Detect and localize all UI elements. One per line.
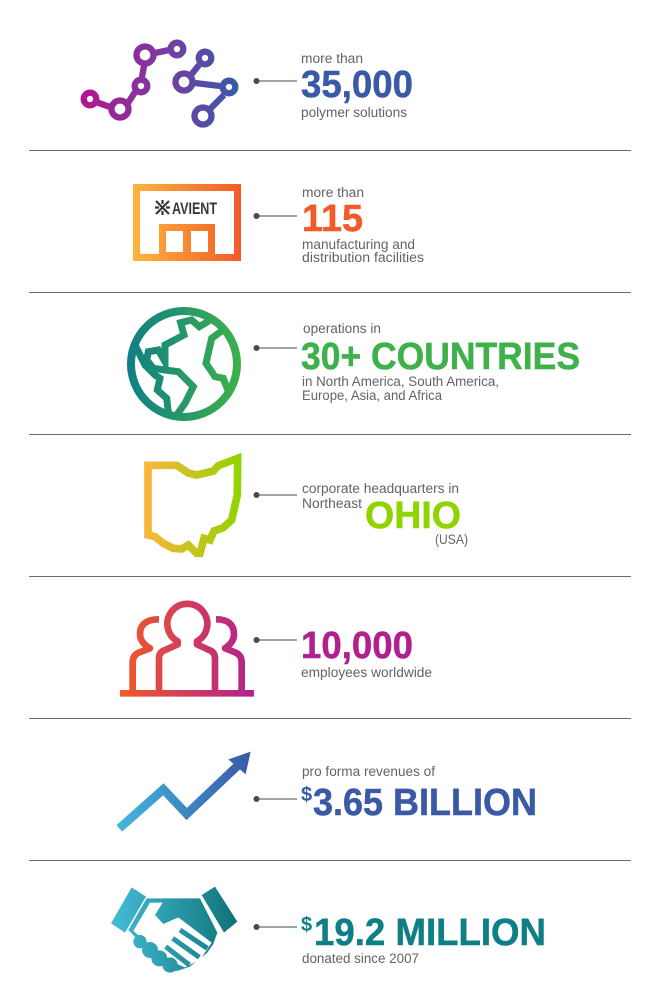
- text block: 19.2 MILLION: [314, 912, 546, 954]
- text block: [301, 321, 580, 403]
- text block: 10,000: [301, 625, 413, 667]
- leader line: [254, 796, 297, 802]
- text block: distribution facilities: [302, 250, 424, 265]
- panel: donations: [111, 887, 546, 973]
- text block: employees worldwide: [301, 665, 432, 680]
- text block: (USA): [435, 532, 468, 547]
- icon: molecules: [84, 43, 235, 125]
- icon: globe: [131, 311, 237, 417]
- leader line: [254, 492, 297, 498]
- text block: [301, 51, 413, 120]
- text block: operations in: [303, 321, 381, 336]
- text block: manufacturing and: [302, 237, 415, 252]
- text block: 3.65 BILLION: [313, 782, 537, 824]
- leader line: [254, 924, 297, 930]
- icon: people: [120, 604, 254, 697]
- text block: more than: [302, 185, 364, 200]
- text block: Europe, Asia, and Africa: [302, 388, 442, 403]
- text block: Northeast: [302, 496, 362, 511]
- leader line: [254, 637, 297, 643]
- text block: [301, 625, 432, 680]
- leader line: [254, 213, 297, 219]
- text block: pro forma revenues of: [302, 764, 435, 779]
- panel: employees: [120, 604, 432, 697]
- panel: headquarters: [148, 458, 468, 553]
- text block: polymer solutions: [301, 105, 407, 120]
- icon: rising arrow: [119, 752, 251, 828]
- text block: [301, 764, 537, 824]
- icon: Ohio outline: [148, 458, 238, 553]
- panel: revenues: [119, 752, 537, 828]
- text block: in North America, South America,: [302, 374, 499, 389]
- panel: countries: [131, 311, 580, 417]
- text block: OHIO: [365, 495, 461, 537]
- text block: corporate headquarters in: [302, 481, 459, 496]
- text block: 115: [302, 198, 363, 240]
- leader line: [254, 78, 297, 84]
- panel: facilities: [133, 184, 424, 265]
- icon: factory: [133, 184, 241, 261]
- leader line: [254, 345, 297, 351]
- text block: $: [301, 784, 312, 806]
- text block: donated since 2007: [302, 951, 419, 966]
- panel: polymer solutions: [84, 43, 413, 125]
- logo: Avient: AVIENT: [172, 199, 217, 218]
- text block: [302, 481, 468, 547]
- text block: [302, 185, 424, 265]
- dividers: [29, 150, 631, 860]
- icon: handshake: [111, 887, 237, 973]
- text block: 30+ COUNTRIES: [301, 336, 580, 378]
- text block: $: [301, 914, 312, 936]
- text block: 35,000: [301, 64, 413, 106]
- text block: more than: [301, 51, 363, 66]
